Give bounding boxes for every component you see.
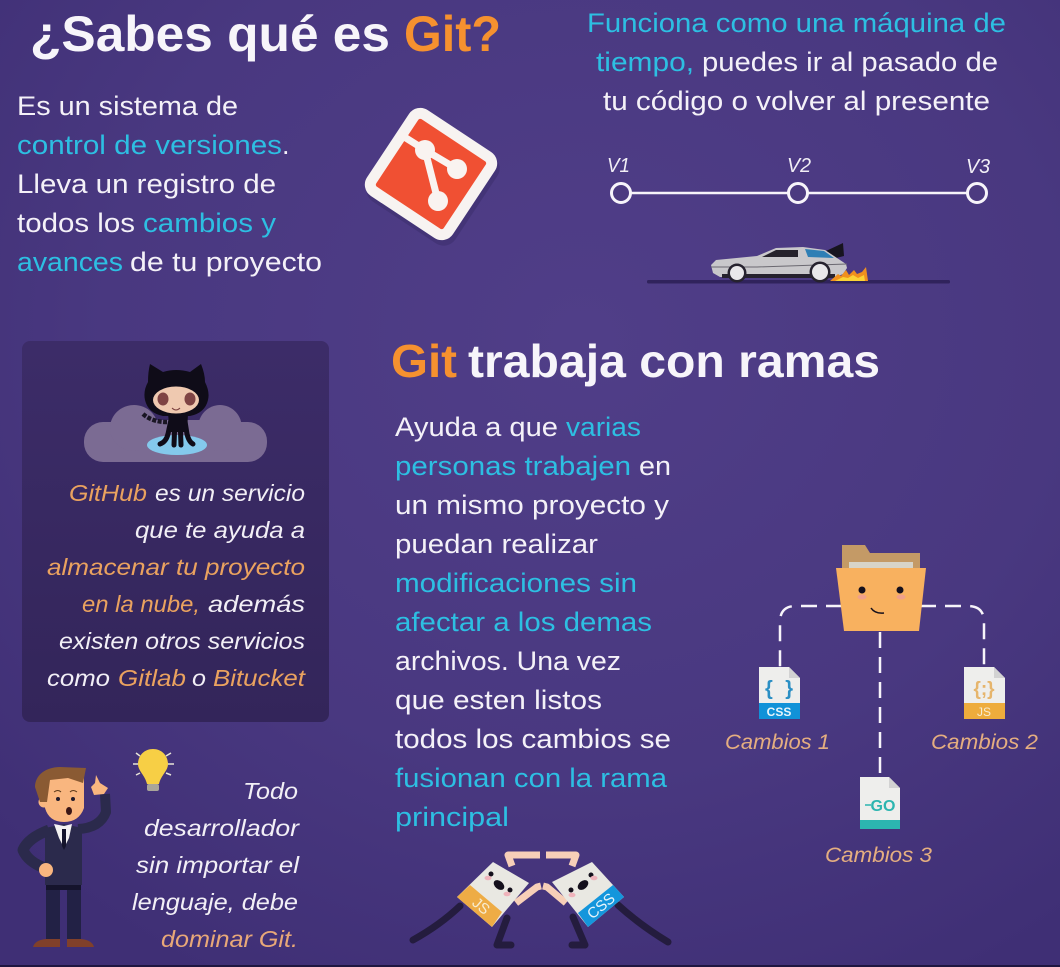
heading: Git trabaja con ramas: Git [391,335,457,387]
illustration: DeLorean on the road [647,243,950,284]
text block: branches explanation: afectar a los demas [395,607,652,637]
labels: Cambios: Cambios 2 [931,731,1038,754]
illustration: JS and CSS files making a heart: CSS [584,890,619,923]
icon: JS file: JS [977,705,991,719]
icon: Git logo [361,107,505,251]
panel: GitHub [22,341,329,722]
diagram: folder and branch files [725,545,1038,867]
text block: what is Git [17,91,322,277]
text block: branches explanation: que esten listos [395,685,602,715]
icon: JS file [964,667,1005,719]
text block: branches explanation: modificaciones sin [395,568,637,598]
illustration: JS and CSS files making a heart: JS [469,894,493,919]
labels: Cambios: Cambios 1 [725,731,830,754]
text block: branches explanation [395,412,671,832]
text block: GitHub description: existen otros servicios [59,628,306,654]
text block: branches explanation: fusionan con la rama [395,763,668,793]
text block: branches explanation: principal [395,802,509,832]
title: ¿Sabes qué es Git?: ¿Sabes qué es [30,6,390,62]
text block: time machine: Funciona como una máquina de [587,8,1006,38]
text block: time machine: tiempo, [596,47,694,77]
text block: time machine [587,8,1006,116]
text block: branches explanation: puedan realizar [395,529,598,559]
text block: GitHub description [47,480,307,691]
icon: cloud with Octocat [84,364,267,462]
icon: CSS file [759,667,800,719]
text block: branches explanation: un mismo proyecto y [395,490,670,520]
icon: CSS file: CSS [767,705,791,719]
text block: what is Git: todos los [17,208,135,238]
icon: Go file: GO [871,798,895,815]
text block: branches explanation: archivos. Una vez [395,646,621,676]
text block: branches explanation: varias [566,412,641,442]
icon: Go file [860,777,900,829]
text block: every developer: Todo [243,778,298,804]
text block: GitHub description: además [208,591,306,617]
text block: branches explanation: todos los cambios se [395,724,671,754]
labels: Cambios [725,731,1038,867]
text block: GitHub description: Gitlab [118,665,186,691]
timeline: versions: V1 [607,155,630,177]
timeline: versions: V3 [966,156,990,178]
text block: GitHub description: o [192,665,206,691]
timeline: versions: V2 [787,155,811,177]
illustration: developer [23,767,108,947]
text block: what is Git: avances [17,247,123,277]
text block: every developer: dominar Git. [161,926,298,952]
title: ¿Sabes qué es Git?: Git? [404,6,501,62]
text block: branches explanation: personas trabajen [395,451,631,481]
text block: time machine: tu código o volver al presente [603,86,990,116]
text block: every developer [132,778,301,952]
text block: what is Git: control de versiones [17,130,282,160]
text block: what is Git: . [282,130,290,160]
icon: JS file: {;} [973,679,995,700]
labels: Cambios: Cambios 3 [825,844,932,867]
text block: GitHub description: que te ayuda a [135,517,305,543]
text block: branches explanation: Ayuda a que [395,412,558,442]
text block: every developer: lenguaje, debe [132,889,298,915]
icon: light bulb [133,749,174,791]
text block: what is Git: cambios y [143,208,277,238]
text block: GitHub description: es un servicio [155,480,305,506]
heading: Git trabaja con ramas: trabaja con ramas [468,335,880,387]
text block: every developer: desarrollador [144,815,301,841]
text block: GitHub description: almacenar tu proyecto [47,554,305,580]
text block: GitHub description: en la nube, [82,591,200,617]
text block: what is Git: Es un sistema de [17,91,238,121]
text block: GitHub description: GitHub [69,480,147,506]
text block: GitHub description: como [47,665,110,691]
timeline: versions [607,155,990,202]
text block: what is Git: Lleva un registro de [17,169,276,199]
text block: time machine: puedes ir al pasado de [702,47,998,77]
icon: CSS file: { } [765,678,793,700]
text block: every developer: sin importar el [136,852,300,878]
text block: branches explanation: en [639,451,671,481]
illustration: JS and CSS files making a heart [413,855,668,945]
text block: GitHub description: Bitucket [213,665,307,691]
icon: smiling folder [836,545,926,631]
text block: what is Git: de tu proyecto [130,247,322,277]
